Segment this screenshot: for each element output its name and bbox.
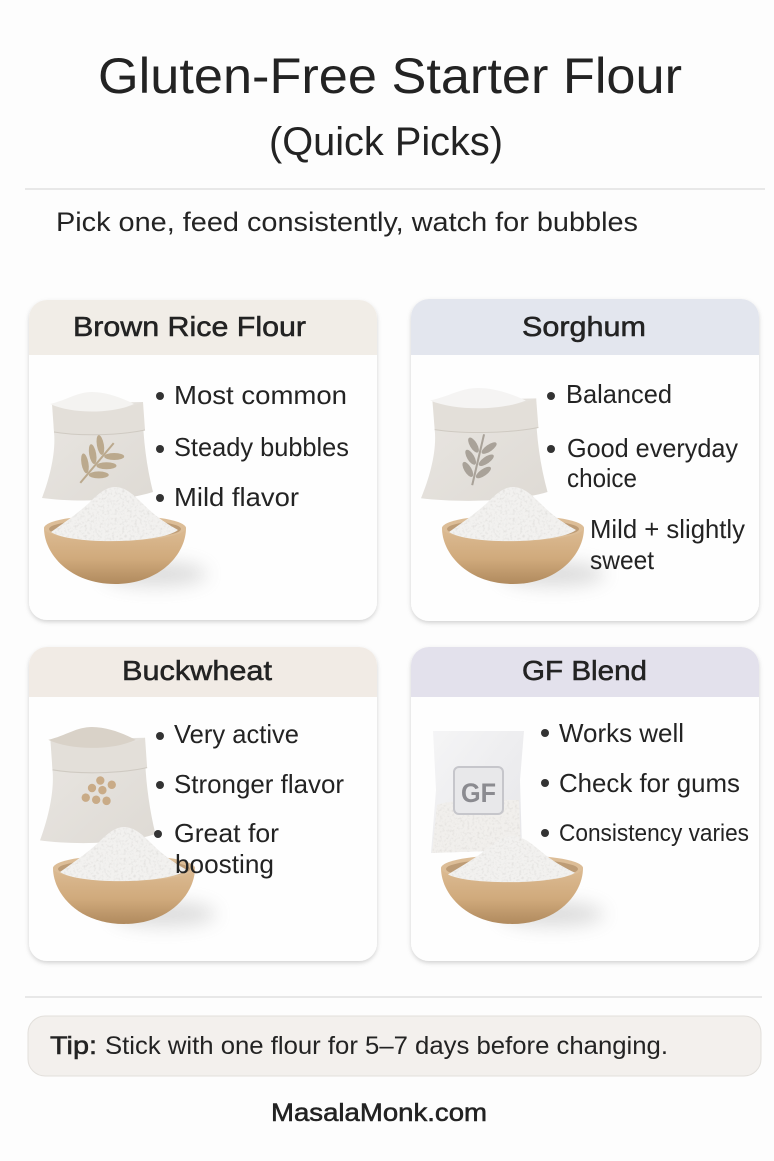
panel: sorghum xyxy=(411,299,759,621)
icon: bowl of buckwheat flour xyxy=(53,827,216,926)
intro text: Pick one, feed consistently, watch for bubbles xyxy=(56,207,638,237)
heading: gf blend: GF Blend xyxy=(522,655,647,686)
bullet list: buckwheat xyxy=(154,719,344,879)
icon: bowl of sorghum flour xyxy=(442,487,605,586)
card header: gf blend xyxy=(411,647,759,697)
bullet list: sorghum: choice xyxy=(567,463,637,493)
bullet list: sorghum: Balanced xyxy=(566,379,672,409)
icon: flour sack with wheat xyxy=(42,392,153,500)
heading: brown rice flour: Brown Rice Flour xyxy=(73,311,306,342)
tip text: Stick with one flour for 5–7 days before changing. xyxy=(105,1032,668,1060)
bullet list: gf blend: Consistency varies xyxy=(559,820,749,847)
icon: gf flour bag: GF xyxy=(461,778,496,808)
panel: buckwheat xyxy=(29,647,377,961)
bullet list: sorghum xyxy=(547,379,745,575)
bullet list: buckwheat: Great for xyxy=(174,818,279,848)
bullet list: brown rice flour: Most common xyxy=(174,380,347,410)
heading: buckwheat: Buckwheat xyxy=(122,655,272,686)
bullet list: buckwheat: Stronger flavor xyxy=(174,769,344,799)
panel: brown rice flour xyxy=(29,300,377,620)
tip callout xyxy=(28,1016,761,1076)
bullet list: sorghum: Mild + slightly xyxy=(590,514,745,544)
bullet list: sorghum: sweet xyxy=(590,545,655,575)
icon: gf flour bag xyxy=(431,731,524,853)
bullet list: buckwheat: Very active xyxy=(174,719,299,749)
icon: flour sack with seeds xyxy=(40,727,155,843)
icon: flour sack with grain xyxy=(421,388,548,501)
bullet list: brown rice flour: Steady bubbles xyxy=(174,432,349,462)
bullet list: gf blend: Check for gums xyxy=(559,768,740,798)
footer: website: MasalaMonk.com xyxy=(271,1099,487,1127)
bullet list: brown rice flour: Mild flavor xyxy=(174,482,299,512)
bullet list: sorghum: Good everyday xyxy=(567,433,738,463)
heading: sorghum: Sorghum xyxy=(522,311,646,342)
bullet list: gf blend xyxy=(541,718,749,847)
bullet list: gf blend: Works well xyxy=(559,718,684,748)
tip label: Tip: xyxy=(50,1032,97,1060)
title: Gluten-Free Starter Flour xyxy=(98,48,682,104)
card header: brown rice flour xyxy=(29,300,377,355)
bullet list: buckwheat: boosting xyxy=(175,849,274,879)
card header: buckwheat xyxy=(29,647,377,697)
icon: bowl of gf blend flour xyxy=(441,836,604,926)
card header: sorghum xyxy=(411,299,759,355)
subtitle: quick picks: (Quick Picks) xyxy=(269,120,503,164)
panel: gf blend xyxy=(411,647,759,961)
icon: bowl of brown rice flour xyxy=(44,487,207,586)
bullet list: brown rice flour xyxy=(156,380,349,512)
